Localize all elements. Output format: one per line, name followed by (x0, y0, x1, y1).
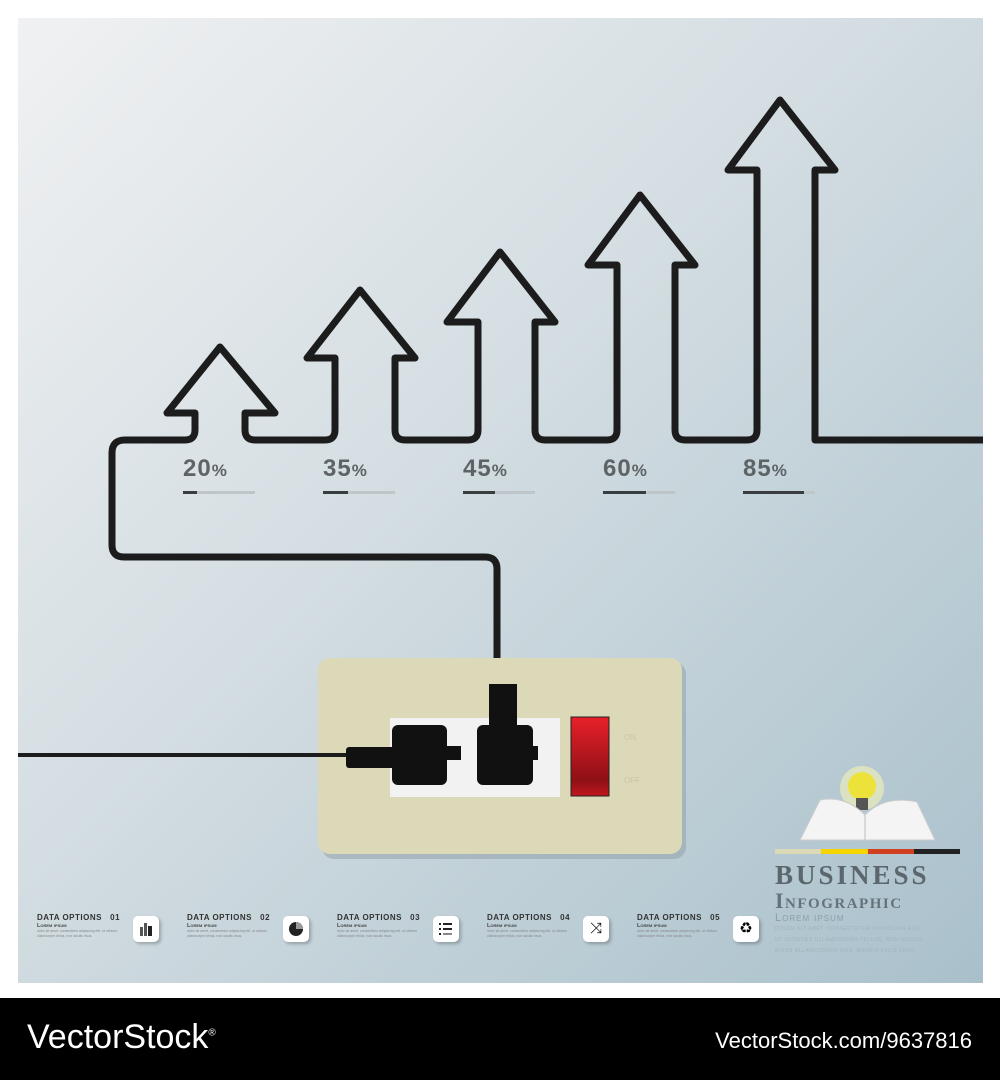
footer watermark bar: VectorStock® (27, 1018, 216, 1056)
power outlet: ON (624, 733, 636, 742)
data option 04 (487, 913, 612, 946)
icon: book with bulb (800, 766, 936, 840)
data option 03: DATA OPTIONS 03 (337, 913, 420, 922)
data option 04: dolor sit amet, consectetur adipiscing elit. ut ultrices ullamcorper tellus, non iaculis risus. (487, 929, 567, 938)
text: 35% (323, 455, 368, 482)
footer watermark bar: VectorStock.com/9637816 (715, 1028, 972, 1053)
title: business infographic: UT ULTRICES ULLAMCORPER TELLUS, NON IACULIS (775, 937, 923, 943)
text: 85% (743, 455, 788, 482)
data option 03: Lorem ipsum (337, 923, 367, 929)
title: business infographic (775, 849, 960, 954)
data option 01 (37, 913, 162, 946)
percent labels: 20% (183, 455, 228, 482)
power outlet: OFF (624, 776, 640, 785)
data option 05: Lorem ipsum (637, 923, 667, 929)
data option 01: Lorem ipsum (37, 923, 67, 929)
data option 01: DATA OPTIONS 01 (37, 913, 120, 922)
data option 03: dolor sit amet, consectetur adipiscing elit. ut ultrices ullamcorper tellus, non iaculis risus. (337, 929, 417, 938)
text: 45% (463, 455, 508, 482)
data option 05 (637, 913, 762, 946)
data option 03 (337, 913, 462, 946)
data option 04: Lorem ipsum (487, 923, 517, 929)
title: business infographic: RISUS ULLAMCORPER NON. MAURIS FELIS ERAT. (775, 948, 915, 954)
title: business infographic: Infographic (775, 888, 903, 913)
data option 02: DATA OPTIONS 02 (187, 913, 270, 922)
title: business infographic: BUSINESS (775, 860, 930, 890)
data option 05: ♻ (739, 920, 753, 937)
data option 02: dolor sit amet, consectetur adipiscing elit. ut ultrices ullamcorper tellus, non iaculis risus. (187, 929, 267, 938)
data option 05: DATA OPTIONS 05 (637, 913, 720, 922)
footer watermark bar (0, 998, 1000, 1080)
text: 60% (603, 455, 648, 482)
data option 05: dolor sit amet, consectetur adipiscing elit. ut ultrices ullamcorper tellus, non iaculis risus. (637, 929, 717, 938)
title: business infographic: DOLOR SIT AMET, CONSECTETUR ADIPISCING ELIT. (775, 926, 922, 932)
data option 04: ⤨ (590, 920, 602, 937)
data option 02 (187, 913, 312, 946)
title: business infographic: Lorem ipsum (775, 912, 845, 924)
data option 04: DATA OPTIONS 04 (487, 913, 570, 922)
power outlet (18, 658, 686, 859)
percent labels (183, 455, 255, 494)
data option 02: Lorem ipsum (187, 923, 217, 929)
data option 01: dolor sit amet, consectetur adipiscing elit. ut ultrices ullamcorper tellus, non iaculis risus. (37, 929, 117, 938)
